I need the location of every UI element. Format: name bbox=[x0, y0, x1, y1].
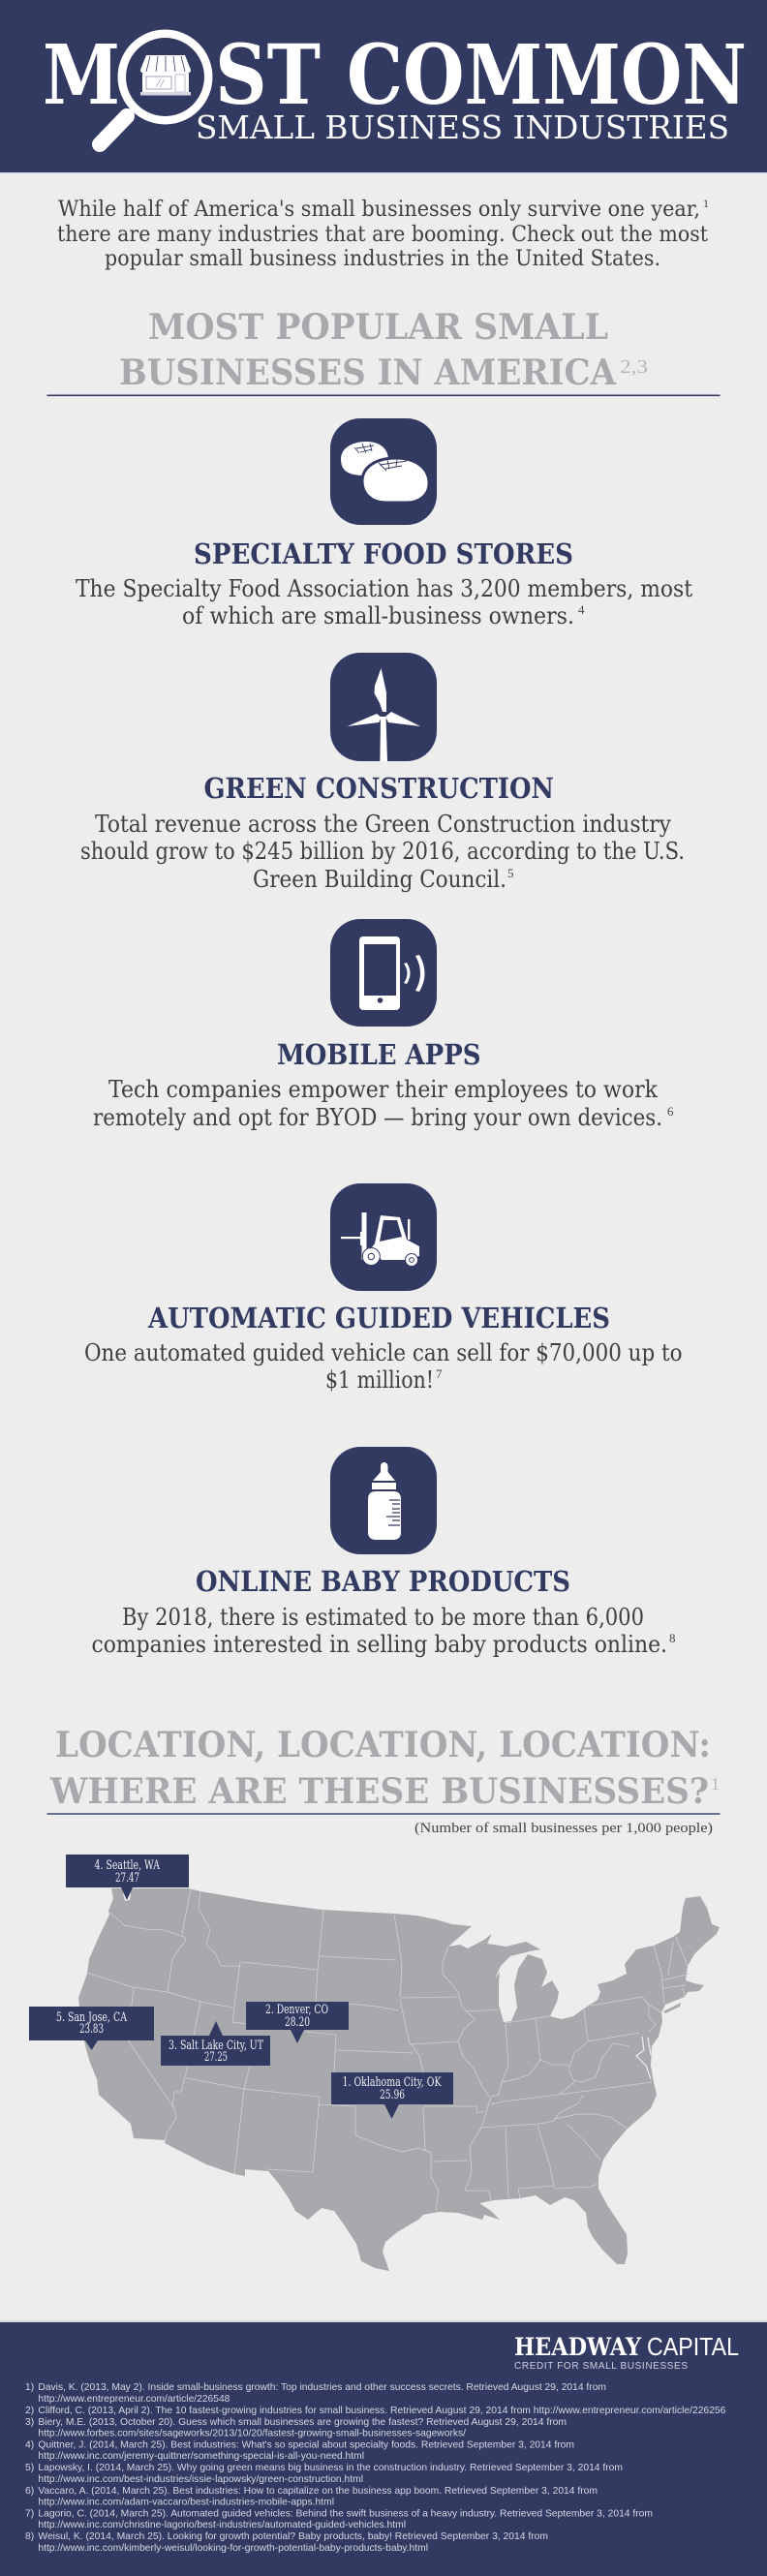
references: 5) bbox=[25, 2463, 34, 2473]
icon: baby bottle bbox=[330, 1447, 437, 1554]
title: ST bbox=[215, 27, 321, 124]
section heading: most popular: BUSINESSES IN AMERICA bbox=[119, 353, 617, 393]
callout: San Jose bbox=[29, 2007, 154, 2050]
heading: ONLINE BABY PRODUCTS bbox=[196, 1565, 570, 1598]
references: Lagorio, C. (2014, March 25). Automated guided vehicles: Behind the swift business of a heavy industry. Retrieved September 3, 2014 from bbox=[38, 2508, 653, 2520]
section heading: most popular: 2,3 bbox=[620, 356, 648, 378]
description bbox=[91, 1604, 676, 1658]
references: http://www.inc.com/best-industries/issie-lapowsky/green-construction.html bbox=[38, 2474, 363, 2485]
description: By 2018, there is estimated to be more than 6,000 bbox=[122, 1604, 644, 1631]
references: http://www.inc.com/kimberly-weisul/looking-for-growth-potential-baby-products-baby.html bbox=[38, 2543, 428, 2554]
references: Clifford, C. (2013, April 2). The 10 fastest-growing industries for small business. Retrieved August 29, 2014 from http://www.entrepreneur.com/article/226256 bbox=[38, 2406, 726, 2416]
description: The Specialty Food Association has 3,200 members, most bbox=[76, 575, 692, 602]
callout: San Jose: 23.83 bbox=[79, 2022, 104, 2037]
description: remotely and opt for BYOD — bring your own devices. bbox=[93, 1104, 662, 1131]
callout: Salt Lake City: 27.25 bbox=[204, 2050, 228, 2065]
section heading: location: 1 bbox=[711, 1774, 720, 1794]
description: 5 bbox=[507, 866, 513, 880]
item: online baby products bbox=[91, 1447, 676, 1658]
references: 2) bbox=[25, 2406, 34, 2416]
item: automatic guided vehicles bbox=[84, 1183, 682, 1394]
references: Vaccaro, A. (2014, March 25). Best industries: How to capitalize on the business app boom. Retrieved September 3, 2014 from bbox=[38, 2486, 598, 2497]
intro text: there are many industries that are booming. Check out the most bbox=[57, 223, 708, 247]
title: M bbox=[43, 27, 120, 124]
heading: MOBILE APPS bbox=[277, 1038, 480, 1071]
description bbox=[93, 1076, 674, 1131]
heading: AUTOMATIC GUIDED VEHICLES bbox=[147, 1302, 610, 1334]
icon: wind turbine bbox=[330, 653, 437, 761]
callout: Salt Lake City: 3. Salt Lake City, UT bbox=[169, 2039, 263, 2053]
item: mobile apps bbox=[93, 919, 674, 1131]
references bbox=[25, 2382, 726, 2554]
references: http://www.entrepreneur.com/article/226548 bbox=[38, 2394, 230, 2405]
description: should grow to $245 billion by 2016, according to the U.S. bbox=[80, 838, 685, 865]
footer bbox=[0, 2320, 767, 2576]
logo: Headway Capital: HEADWAY bbox=[514, 2333, 642, 2361]
callout: Oklahoma City: 1. Oklahoma City, OK bbox=[343, 2075, 442, 2090]
references: Weisul, K. (2014, March 25). Looking for growth potential? Baby products, baby! Retrieved September 3, 2014 from bbox=[38, 2531, 548, 2542]
item: specialty food stores bbox=[76, 418, 692, 629]
description: 4 bbox=[578, 602, 585, 617]
subtitle: SMALL BUSINESS INDUSTRIES bbox=[196, 108, 729, 146]
logo: Headway Capital bbox=[514, 2332, 739, 2372]
description: Total revenue across the Green Construction industry bbox=[95, 811, 671, 838]
description bbox=[84, 1339, 682, 1394]
references: 3) bbox=[25, 2417, 34, 2428]
description bbox=[80, 811, 685, 893]
header banner bbox=[0, 0, 767, 174]
references: Lapowsky, I. (2014, March 25). Why going green means big business in the construction industry. Retrieved September 3, 2014 from bbox=[38, 2463, 623, 2473]
section heading: location: LOCATION, LOCATION, LOCATION: bbox=[55, 1725, 711, 1765]
item: green construction bbox=[80, 653, 685, 893]
section heading: most popular: MOST POPULAR SMALL bbox=[148, 307, 608, 348]
references: 7) bbox=[25, 2508, 34, 2520]
section heading: most popular bbox=[46, 307, 721, 396]
description: Tech companies empower their employees to work bbox=[108, 1076, 658, 1103]
title bbox=[43, 27, 747, 124]
description: of which are small-business owners. bbox=[182, 602, 574, 629]
icon: bread loaves bbox=[330, 418, 437, 525]
references: 1) bbox=[25, 2382, 34, 2393]
description: Green Building Council. bbox=[253, 866, 506, 893]
title: O bbox=[121, 27, 210, 124]
icon: forklift bbox=[330, 1183, 437, 1291]
callout: Seattle bbox=[66, 1855, 189, 1900]
intro text: 1 bbox=[703, 197, 709, 210]
description: 8 bbox=[669, 1631, 676, 1645]
description: $1 million! bbox=[325, 1366, 434, 1394]
references: 4) bbox=[25, 2440, 34, 2450]
callout: San Jose: 5. San Jose, CA bbox=[56, 2010, 127, 2025]
references: Quittner, J. (2014, March 25). Best industries: What's so special about specialty foods. Retrieved September 3, 2014 from bbox=[38, 2440, 574, 2450]
references: http://www.inc.com/jeremy-quittner/something-special-is-all-you-need.html bbox=[38, 2451, 364, 2462]
callout: Oklahoma City bbox=[331, 2072, 453, 2119]
references: 8) bbox=[25, 2531, 34, 2542]
map: continental United States bbox=[78, 1888, 720, 2271]
callout: Seattle: 27.47 bbox=[115, 1871, 139, 1886]
heading: SPECIALTY FOOD STORES bbox=[194, 537, 573, 570]
heading: GREEN CONSTRUCTION bbox=[203, 772, 554, 805]
references: Davis, K. (2013, May 2). Inside small-business growth: Top industries and other success secrets. Retrieved August 29, 2014 from bbox=[38, 2382, 606, 2393]
intro text bbox=[57, 197, 709, 271]
section heading: location: WHERE ARE THESE BUSINESSES? bbox=[49, 1771, 709, 1812]
callout: Seattle: 4. Seattle, WA bbox=[95, 1858, 160, 1873]
callout: Denver: 28.20 bbox=[285, 2015, 310, 2030]
callout: Oklahoma City: 25.96 bbox=[380, 2088, 405, 2102]
callout: Denver: 2. Denver, CO bbox=[265, 2003, 328, 2017]
description: 6 bbox=[667, 1104, 674, 1119]
references: http://www.forbes.com/sites/sageworks/2013/10/20/fastest-growing-small-businesses-sageworks/ bbox=[38, 2429, 466, 2438]
references: http://www.inc.com/adam-vaccaro/best-industries-mobile-apps.html bbox=[38, 2497, 334, 2508]
description: One automated guided vehicle can sell for $70,000 up to bbox=[84, 1339, 682, 1366]
logo: Headway Capital: CREDIT FOR SMALL BUSINESSES bbox=[514, 2361, 688, 2372]
references: Biery, M.E. (2013, October 20). Guess which small businesses are growing the fastest? Retrieved August 29, 2014 from bbox=[38, 2417, 567, 2428]
section heading: location bbox=[46, 1725, 721, 1815]
references: http://www.inc.com/christine-lagorio/best-industries/automated-guided-vehicles.html bbox=[38, 2520, 406, 2530]
icon: smartphone bbox=[330, 919, 437, 1027]
intro text: While half of America's small businesses only survive one year, bbox=[58, 198, 700, 222]
description: companies interested in selling baby products online. bbox=[91, 1631, 667, 1658]
description bbox=[76, 575, 692, 629]
description: 7 bbox=[436, 1366, 443, 1381]
callout: Denver bbox=[246, 2002, 349, 2043]
map note: (Number of small businesses per 1,000 people) bbox=[414, 1821, 713, 1836]
icon: magnifying glass with storefront bbox=[100, 34, 208, 144]
callout: Salt Lake City bbox=[161, 2021, 270, 2066]
intro text: popular small business industries in the United States. bbox=[105, 247, 660, 271]
logo: Headway Capital: CAPITAL bbox=[647, 2332, 739, 2361]
references: 6) bbox=[25, 2486, 34, 2497]
